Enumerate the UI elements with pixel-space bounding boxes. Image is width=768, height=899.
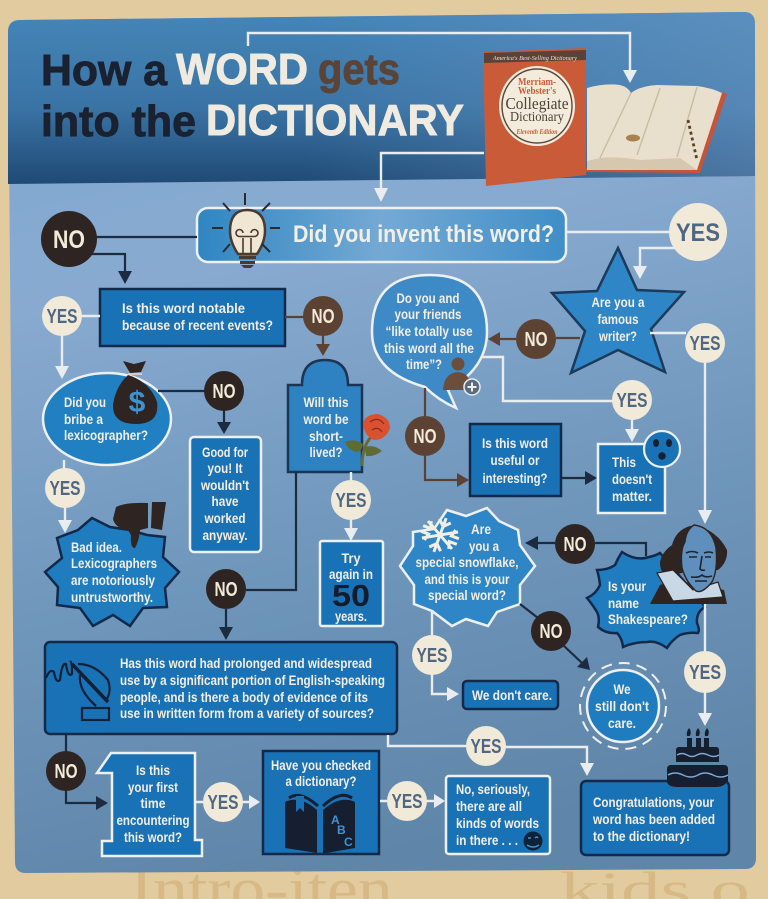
icon: Merriam-Webster dictionary cover: Merriam-: [518, 77, 556, 88]
node: YES below tombstone: YES: [336, 490, 366, 512]
panel: star famous writer: Are you a: [592, 294, 645, 310]
panel: first time encountering: [97, 753, 202, 856]
panel: notable question: [100, 289, 285, 346]
panel: no seriously: in there . . .: [456, 832, 518, 848]
panel: did you bribe: lexicographer?: [64, 427, 148, 443]
panel: good for you: you! It: [208, 460, 243, 476]
panel: this doesn't matter: This: [612, 454, 636, 470]
node: YES checked: YES: [392, 791, 422, 813]
icon: open book ABC: C: [344, 835, 353, 849]
panel: did you bribe: Did you: [64, 394, 106, 410]
panel: special snowflake badge: and this is your: [424, 571, 510, 587]
node: NO below tombstone: [206, 472, 296, 640]
panel: widespread use question: [45, 642, 397, 734]
node: YES from snowflake: YES: [416, 645, 448, 667]
panel: bad idea badge: untrustworthy.: [71, 589, 153, 605]
title: into the: [41, 97, 196, 146]
panel: no seriously: No, seriously,: [456, 781, 530, 797]
icon: rose: [345, 414, 390, 466]
icon: money bag: $: [129, 386, 146, 419]
icon: winking face: [524, 832, 542, 850]
panel: try again in 50 years: Try: [342, 550, 361, 566]
panel: good for you: [190, 437, 261, 552]
panel: try again in 50 years: [320, 541, 383, 626]
node: NO from star: NO: [524, 329, 548, 351]
node: YES left of notable: YES: [46, 306, 78, 328]
panel: speech bubble friends: “like totally use: [386, 323, 473, 339]
panel: checked a dictionary: a dictionary?: [286, 773, 356, 789]
panel: did you bribe: [43, 361, 171, 465]
node: NO right of notable: NO: [312, 306, 334, 328]
panel: useful or interesting: [470, 424, 561, 496]
title: [41, 45, 464, 146]
arrow: dictionary to first question: [374, 153, 484, 202]
panel: notable question: Is this word notable: [122, 300, 245, 316]
icon: surprised face: [644, 431, 680, 467]
panel: bad idea badge: Bad idea.: [71, 539, 122, 555]
panel: good for you: anyway.: [202, 527, 248, 543]
panel: congratulations: [581, 728, 729, 855]
panel: star famous writer: [552, 248, 684, 373]
icon: open book ABC: B: [337, 823, 346, 837]
panel: first time encountering: this word?: [124, 829, 182, 845]
panel: special snowflake badge: special snowflake,: [416, 554, 518, 570]
node: YES first time: YES: [208, 792, 238, 814]
panel: we still don't care: still don't: [595, 698, 649, 714]
node: NO from bribe: NO: [212, 381, 236, 403]
panel: we still don't care: We: [614, 681, 631, 697]
panel: special snowflake badge: you a: [469, 538, 499, 554]
title: WORD: [176, 45, 308, 94]
node: NO below tombstone: NO: [214, 579, 238, 601]
panel: speech bubble friends: your friends: [394, 306, 462, 322]
panel: we don't care: We don't care.: [472, 687, 552, 703]
panel: did you invent this word: Did you invent this word?: [293, 221, 554, 248]
panel: no seriously: kinds of words: [456, 815, 539, 831]
panel: useful or interesting: Is this word: [482, 435, 548, 451]
panel: short-lived tombstone: Will this: [304, 394, 349, 410]
node: NO from bubble: NO: [414, 426, 436, 448]
node: YES from invent: [566, 203, 727, 279]
panel: no seriously: [446, 776, 550, 854]
header band: [8, 12, 755, 184]
node: NO from invent: NO: [53, 226, 85, 254]
node: YES from shakespeare: YES: [689, 662, 721, 684]
node: YES widespread to congratulations: YES: [470, 736, 502, 758]
panel: congratulations: to the dictionary!: [593, 828, 690, 844]
node: YES from bribe: YES: [50, 478, 80, 500]
arrow: useful to doesn't matter: [561, 471, 597, 485]
panel: try again in 50 years: 50: [332, 578, 370, 613]
icon: add person: [443, 358, 480, 395]
panel: shakespeare question: name: [608, 595, 639, 611]
title: How a: [41, 46, 168, 95]
node: YES from bribe: [45, 460, 85, 533]
panel: short-lived tombstone: word be: [303, 411, 349, 427]
icon: Merriam-Webster dictionary cover: Dictionary: [510, 110, 564, 125]
panel: speech bubble friends: this word all the: [384, 340, 474, 356]
node: YES below tombstone: [331, 472, 371, 541]
node: NO from snowflake: [520, 604, 590, 670]
node: NO right of notable: [285, 296, 343, 356]
icon: birthday cake: [667, 728, 728, 787]
icon: hand with quill: [46, 662, 110, 720]
panel: short-lived tombstone: lived?: [310, 444, 342, 460]
panel: star famous writer: famous: [598, 311, 639, 327]
panel: widespread use question: use by a significant portion of English-speaking: [120, 672, 385, 688]
node: NO from shakespeare: NO: [564, 534, 586, 556]
node: YES checked: [380, 781, 445, 821]
panel: speech bubble friends: Do you and: [396, 290, 460, 306]
panel: short-lived tombstone: short-: [309, 428, 343, 444]
node: YES from shakespeare: [684, 604, 726, 726]
panel: speech bubble friends: [372, 275, 487, 408]
panel: widespread use question: people, and is there a body of evidence of its: [120, 689, 368, 705]
panel: good for you: have: [212, 493, 239, 509]
node: YES left of notable: [42, 296, 100, 379]
node: NO from invent: [41, 211, 197, 284]
panel: special snowflake badge: special word?: [428, 587, 506, 603]
node: YES from bubble: [481, 357, 652, 442]
panel: special snowflake badge: [400, 508, 535, 626]
node: NO from widespread: [46, 735, 108, 810]
panel: first time encountering: Is this: [136, 762, 170, 778]
panel: good for you: Good for: [202, 444, 248, 460]
node: NO from bribe: [158, 371, 244, 434]
icon: open book ABC: A: [331, 813, 340, 827]
node: NO from bubble: [405, 388, 469, 487]
node: YES from invent: YES: [676, 219, 720, 247]
icon: open book ABC: [285, 795, 355, 853]
panel: useful or interesting: useful or: [490, 452, 540, 468]
icon: light bulb: [212, 193, 280, 268]
icon: Merriam-Webster dictionary cover: Webster's: [518, 86, 556, 97]
node: YES widespread to congratulations: [388, 726, 594, 776]
panel: speech bubble friends: time”?: [406, 356, 442, 372]
panel: checked a dictionary: Have you checked: [271, 757, 371, 773]
node: YES from bubble: YES: [616, 390, 648, 412]
panel: this doesn't matter: [598, 431, 680, 513]
panel: notable question: because of recent events?: [122, 317, 273, 333]
panel: bad idea badge: [45, 502, 179, 626]
panel: checked a dictionary: [263, 751, 379, 854]
panel: try again in 50 years: years.: [335, 608, 367, 624]
panel: no seriously: there are all: [456, 798, 522, 814]
wall background lettering: [130, 856, 750, 899]
panel: congratulations: word has been added: [592, 811, 715, 827]
title: gets: [318, 45, 400, 94]
icon: snowflake: [416, 512, 464, 558]
node: YES from star: YES: [690, 333, 720, 355]
icon: Merriam-Webster dictionary cover: [483, 48, 586, 186]
panel: we still don't care: care.: [608, 715, 636, 731]
node: NO from snowflake: NO: [540, 621, 562, 643]
panel: short-lived tombstone: [288, 360, 390, 472]
panel: we don't care: [463, 681, 558, 709]
panel: we still don't care: [580, 663, 666, 749]
panel: this doesn't matter: doesn't: [612, 471, 652, 487]
node: NO from widespread: NO: [54, 761, 78, 783]
title: DICTIONARY: [206, 96, 464, 145]
arrow: title to open dictionary: [248, 33, 637, 83]
panel: first time encountering: encountering: [116, 812, 190, 828]
panel: star famous writer: writer?: [598, 328, 637, 344]
panel: did you invent this word: [197, 193, 566, 268]
panel: good for you: wouldn't: [200, 477, 249, 493]
panel: widespread use question: Has this word had prolonged and widespread: [120, 655, 372, 671]
panel: bad idea badge: are notoriously: [71, 572, 155, 588]
icon: open dictionary: [586, 84, 727, 173]
icon: Merriam-Webster dictionary cover: Collegiate: [506, 94, 568, 113]
panel: first time encountering: your first: [128, 779, 178, 795]
icon: Merriam-Webster dictionary cover: Eleventh Edition: [516, 128, 558, 136]
panel: shakespeare question: Is your: [608, 578, 646, 594]
panel: special snowflake badge: Are: [471, 521, 491, 537]
panel: try again in 50 years: again in: [329, 566, 373, 582]
panel: first time encountering: time: [140, 795, 166, 811]
panel: this doesn't matter: matter.: [612, 488, 652, 504]
node: YES first time: [196, 782, 260, 822]
panel: congratulations: Congratulations, your: [593, 794, 714, 810]
panel: useful or interesting: interesting?: [482, 470, 548, 486]
node: YES from snowflake: [412, 610, 459, 701]
panel: did you bribe: bribe a: [64, 411, 103, 427]
panel: shakespeare question: Shakespeare?: [608, 611, 688, 627]
node: NO from shakespeare: [525, 524, 646, 564]
node: NO from star: [488, 319, 580, 359]
panel: bad idea badge: Lexicographers: [71, 555, 157, 571]
icon: Merriam-Webster dictionary cover: America's Best-Selling Dictionary: [492, 55, 577, 62]
panel: good for you: worked: [204, 510, 246, 526]
panel: widespread use question: use in written form from a variety of sources?: [120, 705, 374, 721]
icon: thumbs down: [113, 502, 166, 548]
icon: Shakespeare portrait: [650, 525, 727, 604]
node: YES from star: [650, 323, 725, 524]
panel: shakespeare question: [587, 525, 727, 648]
